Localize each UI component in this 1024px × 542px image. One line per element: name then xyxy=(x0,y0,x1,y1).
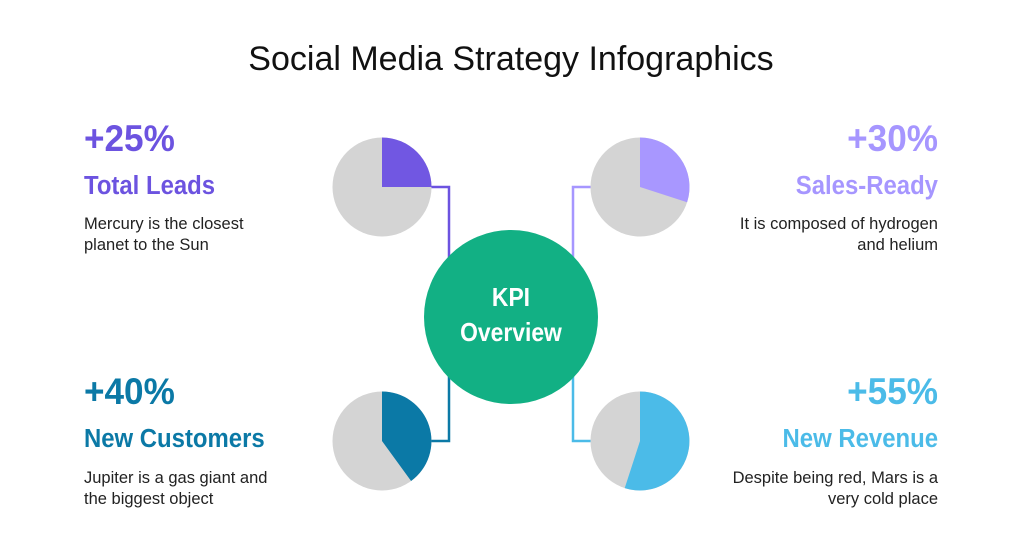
connector: top-left xyxy=(431,187,449,265)
title: Social Media Strategy Infographics xyxy=(248,40,774,78)
text block: new customers xyxy=(84,370,267,508)
text block: total leads: planet to the Sun xyxy=(84,236,209,254)
pie: 30% xyxy=(590,138,690,236)
text block: new revenue: Despite being red, Mars is a xyxy=(733,469,939,487)
pie: 25% xyxy=(332,138,432,236)
center circle: KPI Overview: Overview xyxy=(460,319,563,347)
pie: 55% xyxy=(590,392,690,490)
text block: total leads: Mercury is the closest xyxy=(84,215,244,233)
text block: new revenue: New Revenue xyxy=(783,424,938,453)
text block: new customers: Jupiter is a gas giant and xyxy=(84,469,267,487)
text block: new revenue xyxy=(733,370,939,508)
text block: total leads xyxy=(84,117,244,254)
text block: new revenue: +55% xyxy=(847,370,938,412)
text block: new customers: +40% xyxy=(84,370,175,412)
text block: new customers: the biggest object xyxy=(84,490,214,508)
connector: bottom-left xyxy=(431,370,449,441)
center circle: KPI Overview: KPI xyxy=(492,284,530,312)
pie: 40% xyxy=(332,392,432,490)
center circle: KPI Overview xyxy=(424,230,598,404)
text block: sales-ready: It is composed of hydrogen xyxy=(740,215,938,233)
text block: total leads: Total Leads xyxy=(84,171,215,200)
text block: sales-ready xyxy=(740,117,938,254)
connector: top-right xyxy=(573,187,591,265)
text block: sales-ready: Sales-Ready xyxy=(796,171,938,200)
text block: new customers: New Customers xyxy=(84,424,265,453)
text block: new revenue: very cold place xyxy=(828,490,938,508)
text block: total leads: +25% xyxy=(84,117,175,159)
text block: sales-ready: and helium xyxy=(857,236,938,254)
text block: sales-ready: +30% xyxy=(847,117,938,159)
connector: bottom-right xyxy=(573,370,591,441)
